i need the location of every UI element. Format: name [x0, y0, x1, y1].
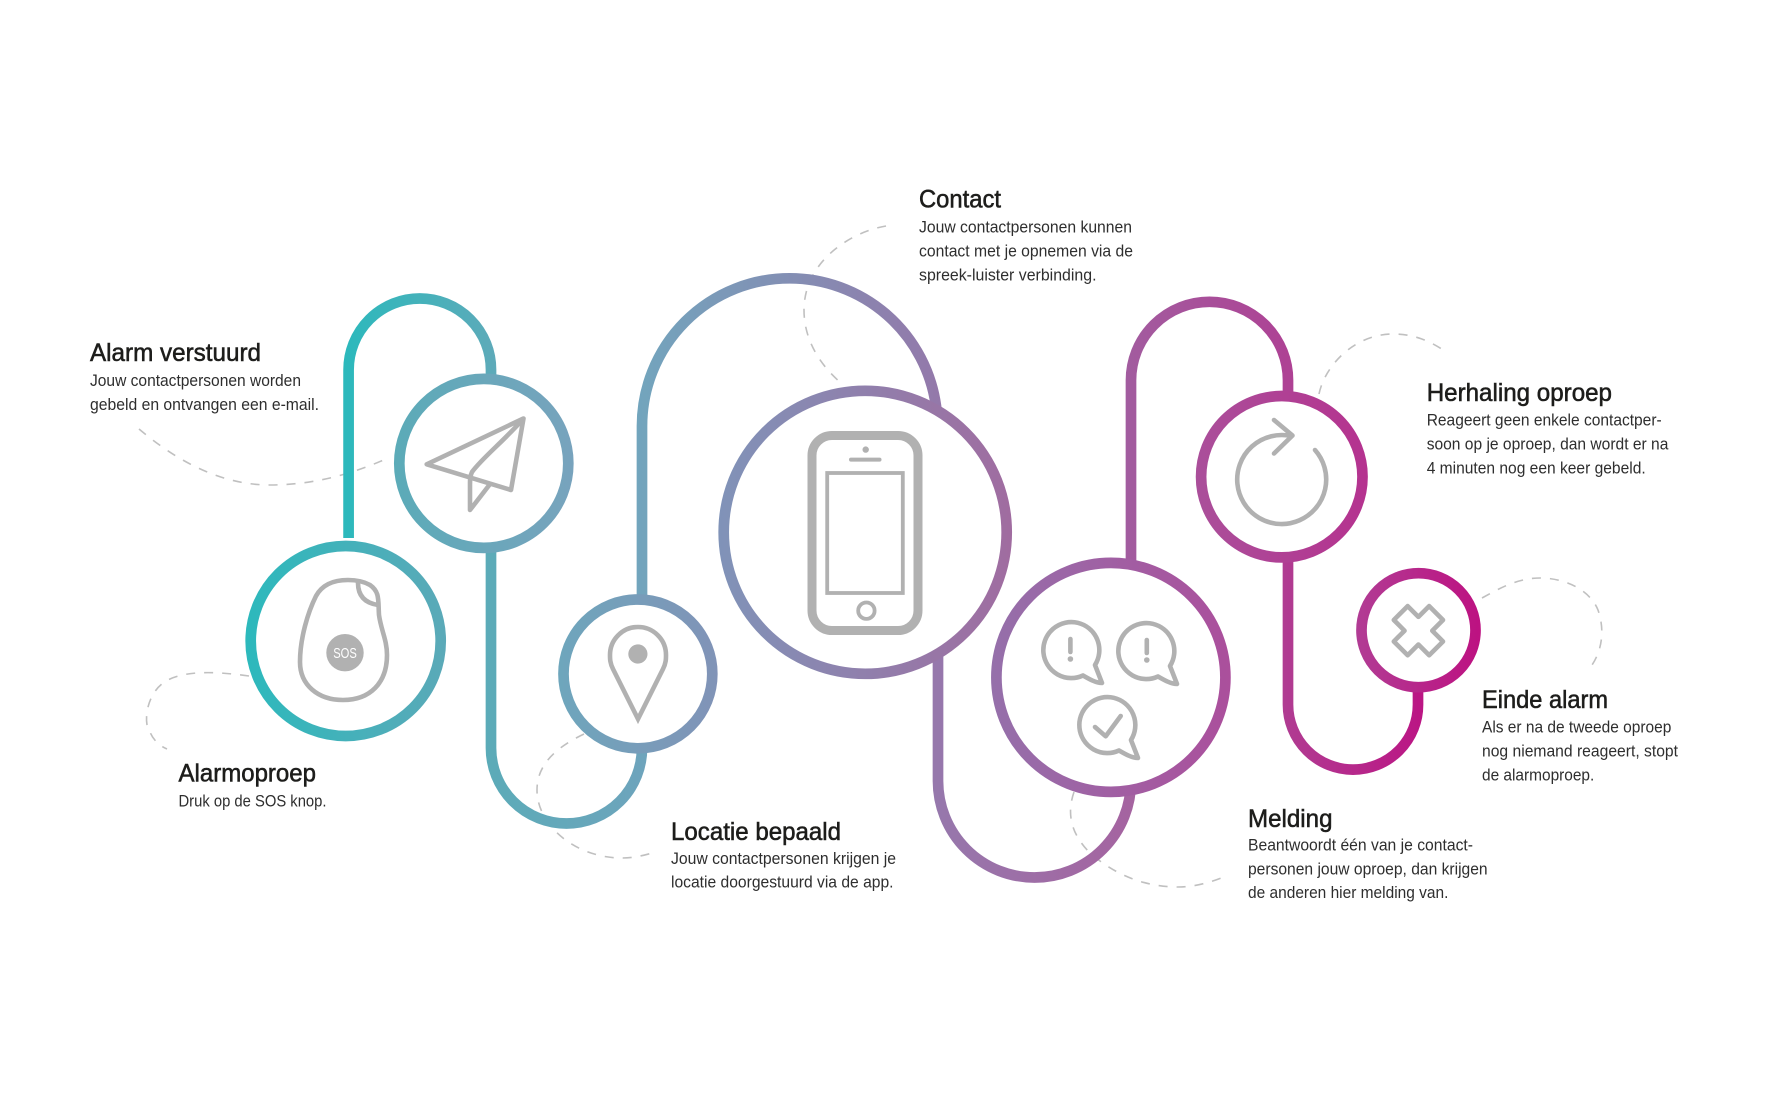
step circle: alarm verstuurd	[399, 379, 568, 548]
text block: einde alarm: Als er na de tweede oproep	[1482, 719, 1671, 737]
text block: melding	[1248, 805, 1488, 902]
step circle: locatie bepaald	[564, 600, 712, 748]
text block: alarmoproep	[178, 759, 326, 810]
text block: einde alarm	[1482, 686, 1678, 785]
text block: alarmoproep: Alarmoproep	[178, 759, 316, 787]
icon: smartphone	[812, 436, 918, 630]
dashed connector: contact	[804, 226, 886, 383]
icon: speech bubble with check mark	[1079, 697, 1138, 758]
dashed connector: locatie bepaald	[537, 734, 652, 858]
step circle: einde alarm	[1362, 573, 1476, 687]
text block: melding: Melding	[1248, 805, 1332, 833]
text block: locatie bepaald: Jouw contactpersonen krijgen je	[671, 850, 896, 868]
text block: herhaling oproep: Reageert geen enkele contactper-	[1427, 411, 1662, 429]
text block: melding: personen jouw oproep, dan krijgen	[1248, 860, 1488, 878]
step circle: herhaling oproep	[1201, 396, 1363, 557]
route line: locatie to contact	[642, 278, 937, 600]
text block: contact: contact met je opnemen via de	[919, 242, 1133, 260]
icon: SOS fob: SOS	[333, 645, 357, 662]
route line: alarm verstuurd to locatie	[491, 545, 642, 824]
text block: alarm verstuurd: Alarm verstuurd	[90, 339, 261, 367]
text block: herhaling oproep: soon op je oproep, dan wordt er na	[1427, 436, 1668, 454]
step circle: alarmoproep	[251, 546, 441, 736]
dashed connector: melding	[1071, 792, 1226, 887]
step circle: melding	[996, 563, 1225, 792]
text block: contact: Contact	[919, 186, 1001, 214]
text block: contact	[919, 186, 1133, 284]
icon: speech bubble with exclamation	[1043, 622, 1102, 683]
icon: repeat arrow	[1237, 420, 1326, 524]
text block: locatie bepaald: locatie doorgestuurd via de app.	[671, 874, 894, 892]
text block: alarm verstuurd: Jouw contactpersonen worden	[90, 372, 301, 390]
text block: alarm verstuurd: gebeld en ontvangen een e-mail.	[90, 396, 319, 414]
text block: melding: Beantwoordt één van je contact-	[1248, 837, 1473, 855]
text block: einde alarm: nog niemand reageert, stopt	[1482, 743, 1678, 761]
text block: herhaling oproep	[1427, 379, 1668, 477]
route line: alarmoproep to alarm verstuurd	[349, 299, 491, 538]
dashed connector: alarmoproep	[147, 673, 249, 749]
icon: SOS fob	[300, 580, 387, 700]
text block: contact: Jouw contactpersonen kunnen	[919, 218, 1132, 236]
text block: alarm verstuurd	[90, 339, 319, 414]
text block: einde alarm: Einde alarm	[1482, 686, 1608, 714]
dashed connector: herhaling oproep	[1319, 334, 1446, 394]
text block: contact: spreek-luister verbinding.	[919, 266, 1096, 284]
dashed connector: einde alarm	[1482, 578, 1602, 665]
text block: locatie bepaald: Locatie bepaald	[671, 818, 841, 846]
icon: paper plane	[427, 418, 524, 510]
route line: melding to herhaling	[1131, 302, 1288, 570]
step circle: contact	[724, 391, 1007, 674]
icon: location pin	[610, 627, 666, 719]
text block: herhaling oproep: Herhaling oproep	[1427, 379, 1612, 407]
text block: herhaling oproep: 4 minuten nog een keer gebeld.	[1427, 459, 1646, 477]
icon: speech bubble with exclamation	[1118, 623, 1177, 684]
text block: locatie bepaald	[671, 818, 896, 892]
text block: melding: de anderen hier melding van.	[1248, 884, 1448, 902]
route line: herhaling to einde	[1288, 555, 1418, 770]
icon: cross	[1383, 595, 1454, 666]
route line: contact to melding	[938, 650, 1131, 877]
text block: einde alarm: de alarmoproep.	[1482, 767, 1594, 785]
text block: alarmoproep: Druk op de SOS knop.	[178, 792, 326, 810]
dashed connector: alarm verstuurd	[139, 429, 388, 485]
